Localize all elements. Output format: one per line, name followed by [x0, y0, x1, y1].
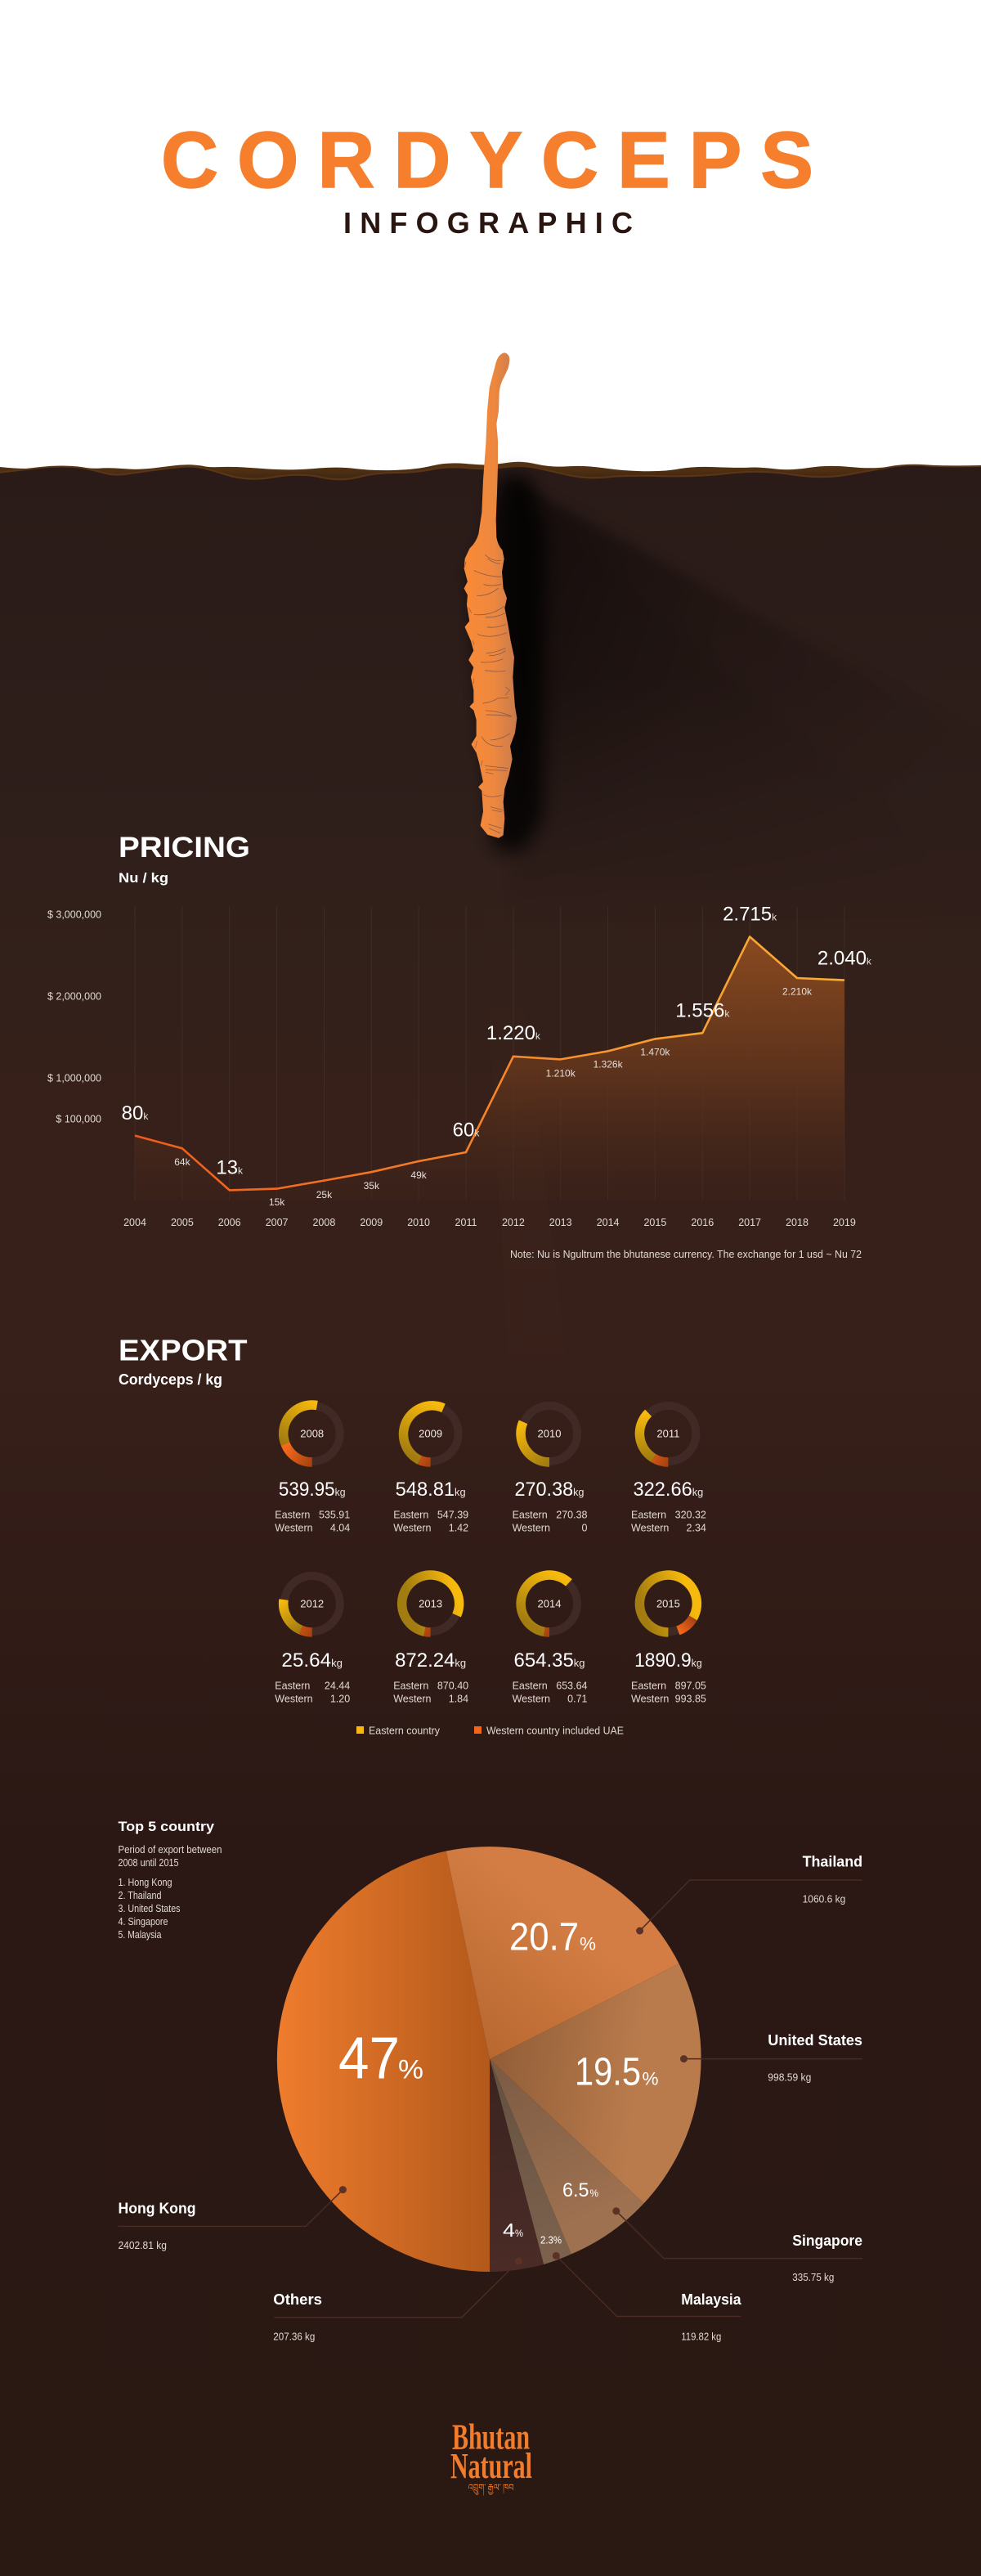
- donut: 2015: 1890.9kg: [634, 1649, 702, 1672]
- donut: 2013: 2013: [419, 1598, 442, 1609]
- text block: top 5 country: [118, 1819, 222, 1941]
- donut: 2014: Eastern: [513, 1680, 548, 1691]
- donut: 2014: [513, 1575, 588, 1704]
- x axis years: 2013: [549, 1217, 572, 1228]
- donut: 2009: [393, 1406, 468, 1534]
- minor value labels: 25k: [316, 1189, 333, 1200]
- x axis years: 2016: [691, 1217, 714, 1228]
- text block: top 5 country: Top 5 country: [118, 1819, 215, 1834]
- pie percent labels: %: [590, 2188, 598, 2199]
- slice: malaysia: [490, 2059, 571, 2264]
- major value labels: 1.220k: [486, 1022, 541, 1044]
- callout: singapore: 335.75 kg: [792, 2271, 834, 2283]
- donut: 2012: 25.64kg: [281, 1649, 343, 1672]
- heading: export: [119, 1333, 248, 1388]
- minor value labels: 2.210k: [782, 985, 813, 997]
- donut: 2008: Western: [275, 1523, 313, 1534]
- minor value labels: 35k: [364, 1180, 380, 1192]
- donut: 2008: 539.95kg: [279, 1479, 346, 1501]
- donut: 2011: 2011: [656, 1428, 679, 1439]
- callout: hong kong: 2402.81 kg: [118, 2239, 167, 2251]
- x axis years: 2019: [833, 1217, 856, 1228]
- x axis years: 2008: [312, 1217, 335, 1228]
- heading: pricing: [119, 832, 250, 886]
- slice: singapore: [490, 2059, 644, 2254]
- x axis years: 2014: [597, 1217, 620, 1228]
- minor value labels: 64k: [174, 1156, 191, 1168]
- pie percent labels: [338, 1915, 659, 2246]
- donut: 2010: 0: [582, 1523, 588, 1534]
- chart area fill: [135, 936, 844, 1200]
- legend: Western country included UAE: [486, 1724, 624, 1737]
- callout: malaysia: Malaysia: [681, 2291, 742, 2308]
- chart line: [135, 936, 844, 1190]
- pie percent labels: 19.5: [575, 2051, 641, 2094]
- donut: 2013: 870.40: [437, 1680, 468, 1691]
- donut: 2014: 653.64: [556, 1680, 588, 1691]
- donut: 2008: 2008: [300, 1428, 324, 1439]
- donut: 2015: 2015: [656, 1598, 680, 1609]
- heading: pricing: PRICING: [119, 832, 250, 864]
- title: [161, 115, 813, 240]
- donut: 2011: 320.32: [675, 1510, 706, 1521]
- x axis years: 2007: [266, 1217, 289, 1228]
- donut: 2013: 872.24kg: [395, 1649, 466, 1672]
- callout: others: Others: [273, 2291, 322, 2308]
- callout: united states: [680, 2032, 862, 2084]
- donut: 2011: Western: [631, 1523, 669, 1534]
- x axis years: 2009: [360, 1217, 383, 1228]
- x axis years: 2004: [123, 1217, 146, 1228]
- donut: 2013: [393, 1575, 468, 1704]
- pie percent labels: %: [515, 2228, 523, 2239]
- donut: 2015: 897.05: [675, 1680, 706, 1691]
- major value labels: 80k: [122, 1102, 149, 1124]
- donut: 2013: 1.84: [449, 1693, 468, 1704]
- donut: 2009: Western: [393, 1523, 432, 1534]
- legend: Eastern country: [369, 1724, 440, 1737]
- illustration: cordyceps: [464, 353, 517, 837]
- y axis labels: $ 100,000: [56, 1114, 101, 1125]
- cordyceps shadow: [469, 476, 546, 850]
- logo: bhutan natural: [450, 2417, 532, 2496]
- donut: 2015: 993.85: [675, 1693, 706, 1704]
- pie chart: [277, 1847, 701, 2272]
- minor value labels: 1.470k: [640, 1046, 670, 1057]
- donut: 2015: [631, 1575, 706, 1704]
- callout: thailand: 1060.6 kg: [803, 1892, 845, 1905]
- major value labels: 2.040k: [818, 947, 872, 969]
- donut: 2010: 2010: [538, 1428, 561, 1439]
- pie percent labels: 47: [338, 2026, 400, 2092]
- donut: 2011: [631, 1406, 706, 1534]
- logo: bhutan natural: Natural: [450, 2446, 532, 2486]
- shadow wedge: [531, 494, 759, 802]
- callout: malaysia: [553, 2252, 742, 2342]
- major value labels: 60k: [453, 1120, 480, 1142]
- callout: singapore: Singapore: [792, 2233, 862, 2249]
- slice: united states: [490, 1963, 701, 2203]
- legend: [356, 1724, 624, 1737]
- callout: thailand: [636, 1853, 862, 1935]
- donut: 2009: 547.39: [437, 1510, 468, 1521]
- donut: 2014: 654.35kg: [513, 1649, 585, 1672]
- donut: 2009: 2009: [419, 1428, 442, 1439]
- subheading: cordyceps per kg: Cordyceps / kg: [119, 1371, 222, 1388]
- minor value labels: 1.210k: [546, 1068, 576, 1079]
- donut: 2014: Western: [513, 1693, 550, 1704]
- line chart: price per kg: [47, 904, 872, 1228]
- donut: 2012: 2012: [300, 1598, 324, 1609]
- callout: others: 207.36 kg: [273, 2330, 315, 2342]
- donut: 2009: 1.42: [449, 1523, 468, 1534]
- heading: export: EXPORT: [119, 1333, 248, 1367]
- major value labels: 13k: [216, 1156, 244, 1179]
- x axis years: 2018: [786, 1217, 809, 1228]
- donut: 2010: [513, 1406, 588, 1534]
- logo: bhutan natural: Bhutan: [452, 2417, 530, 2457]
- callout: hong kong: Hong Kong: [118, 2200, 196, 2216]
- callout: singapore: [612, 2207, 862, 2283]
- donut: 2012: Western: [275, 1693, 313, 1704]
- donut: 2012: [275, 1576, 350, 1704]
- donut: 2012: 1.20: [330, 1693, 350, 1704]
- donut: 2011: Eastern: [631, 1510, 666, 1521]
- title: cordyceps: CORDYCEPS: [161, 115, 813, 204]
- text block: top 5 country: 2008 until 2015: [118, 1857, 179, 1869]
- x axis years: 2015: [643, 1217, 666, 1228]
- pie percent labels: 6.5: [562, 2179, 589, 2201]
- y axis labels: [47, 909, 101, 1125]
- x axis years: 2006: [218, 1217, 241, 1228]
- y axis labels: $ 3,000,000: [47, 909, 101, 921]
- minor value labels: [174, 985, 813, 1208]
- pie percent labels: 2.3%: [540, 2234, 562, 2246]
- donut: 2013: Western: [393, 1693, 432, 1704]
- x axis years: [123, 1217, 856, 1228]
- donut: 2014: 0.71: [567, 1693, 588, 1704]
- callout: others: [273, 2257, 522, 2342]
- donut: 2008: Eastern: [275, 1510, 310, 1521]
- minor value labels: 1.326k: [594, 1059, 624, 1070]
- slice: hong kong: [277, 1851, 490, 2272]
- donut: 2011: 2.34: [687, 1523, 706, 1534]
- minor value labels: 49k: [410, 1169, 428, 1181]
- donut: 2013: Eastern: [393, 1680, 428, 1691]
- note: currency: Note: Nu is Ngultrum the bhutanese currency. The exchange for 1 usd ~ Nu 72: [510, 1248, 862, 1260]
- donut: 2008: [275, 1405, 350, 1534]
- subtitle: infographic: INFOGRAPHIC: [343, 206, 633, 240]
- pie percent labels: %: [398, 2054, 423, 2084]
- callout: hong kong: [118, 2186, 347, 2251]
- donut: 2009: Eastern: [393, 1510, 428, 1521]
- callout: united states: United States: [768, 2032, 862, 2049]
- y axis labels: $ 1,000,000: [47, 1073, 101, 1084]
- callout: united states: 998.59 kg: [768, 2071, 811, 2084]
- soil top layer: [0, 462, 981, 491]
- text block: top 5 country: 3. United States: [118, 1903, 180, 1914]
- donut: 2009: 548.81kg: [396, 1479, 466, 1501]
- pie percent labels: %: [580, 1933, 596, 1954]
- text block: top 5 country: Period of export between: [118, 1844, 222, 1856]
- callout: malaysia: 119.82 kg: [681, 2330, 721, 2342]
- text block: top 5 country: 5. Malaysia: [118, 1929, 162, 1941]
- y axis labels: $ 2,000,000: [47, 991, 101, 1003]
- donut: 2008: 4.04: [330, 1523, 350, 1534]
- x axis years: 2012: [502, 1217, 525, 1228]
- donut: 2012: Eastern: [275, 1680, 310, 1691]
- donut: 2010: 270.38kg: [515, 1479, 584, 1501]
- slice: others: [490, 2059, 544, 2272]
- page background white sky: [0, 0, 981, 491]
- text block: top 5 country: 2. Thailand: [118, 1890, 162, 1901]
- text block: top 5 country: 4. Singapore: [118, 1916, 168, 1928]
- donut: 2014: 2014: [538, 1598, 561, 1609]
- callout: thailand: Thailand: [803, 1853, 862, 1869]
- minor value labels: 15k: [269, 1196, 285, 1208]
- x axis years: 2011: [455, 1217, 477, 1228]
- major value labels: [122, 904, 872, 1179]
- logo: bhutan natural: འབྲུག་ རྒྱལ་ ཁབ: [468, 2480, 514, 2496]
- major value labels: 2.715k: [723, 904, 777, 926]
- donut: 2012: 24.44: [325, 1680, 350, 1691]
- donut: 2010: Eastern: [513, 1510, 548, 1521]
- x axis years: 2017: [738, 1217, 761, 1228]
- donut: 2008: 535.91: [319, 1510, 350, 1521]
- light ray: [482, 891, 572, 1407]
- donut: 2010: 270.38: [556, 1510, 588, 1521]
- donut: 2015: Western: [631, 1693, 669, 1704]
- donut: 2011: 322.66kg: [634, 1479, 703, 1501]
- pie percent labels: 4: [503, 2219, 515, 2241]
- donut: 2010: Western: [513, 1523, 550, 1534]
- major value labels: 1.556k: [675, 1000, 730, 1022]
- x axis years: 2005: [171, 1217, 194, 1228]
- text block: top 5 country: 1. Hong Kong: [118, 1877, 172, 1888]
- pie percent labels: %: [643, 2069, 659, 2089]
- donut: 2015: Eastern: [631, 1680, 666, 1691]
- subheading: Nu per kg: Nu / kg: [119, 870, 168, 886]
- pie percent labels: 20.7: [509, 1915, 579, 1959]
- x axis years: 2010: [407, 1217, 430, 1228]
- slice: thailand: [446, 1847, 679, 2059]
- chart grid lines: [135, 907, 844, 1200]
